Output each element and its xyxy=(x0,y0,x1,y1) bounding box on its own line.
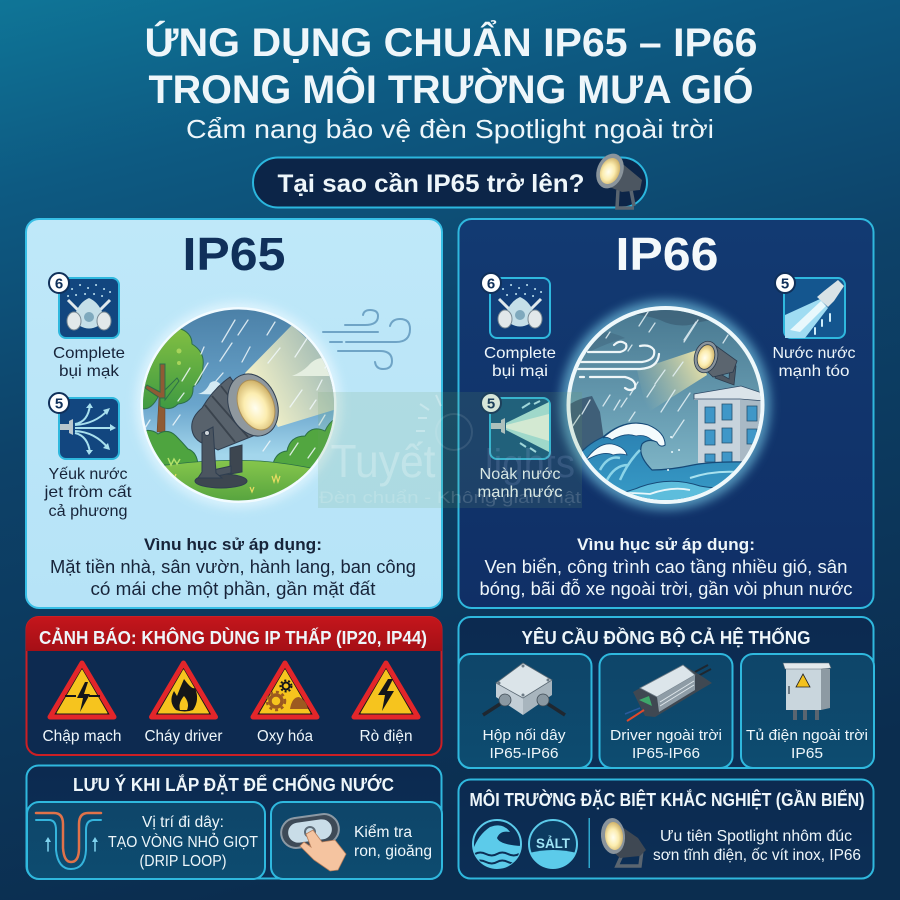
card: junction box xyxy=(458,654,592,768)
text: complete dust: Complete xyxy=(484,345,556,362)
icon: cabinet xyxy=(783,663,831,720)
icon: salt: SẢLT xyxy=(536,835,570,851)
panel: harsh environment xyxy=(458,780,874,878)
text: cabinet xyxy=(746,727,868,762)
panel: IP65 xyxy=(26,219,442,608)
text: applications IP66: bóng, bãi đỗ xe ngoài trời, gần vòi phun nước xyxy=(480,578,852,599)
watermark: Tuyết xyxy=(330,435,436,487)
heading: IP66: IP66 xyxy=(616,228,718,280)
icon: driver fire xyxy=(152,663,216,717)
icon: electric leak xyxy=(354,663,418,717)
text: applications IP65 xyxy=(50,535,416,599)
text: junction box xyxy=(482,727,566,762)
text: water jets: jet fròm cất xyxy=(43,484,132,501)
callout pill: why IP65 xyxy=(253,149,647,208)
text: strong jet left: mạnh nước xyxy=(478,484,562,501)
text: water jets xyxy=(43,466,132,520)
text: gasket check: ron, gioăng xyxy=(354,843,432,860)
text: applications IP65: Vìnu hục sử áp dụng: xyxy=(144,535,322,554)
illustration: storm wave and building xyxy=(560,300,770,515)
text: junction box: Hộp nối dây xyxy=(482,727,566,744)
text: applications IP66: Ven biển, công trình cao tầng nhiều gió, sân xyxy=(484,556,848,577)
text: strong jet left: Noàk nước xyxy=(480,466,560,483)
text: electric leak: Rò điện xyxy=(360,728,412,745)
text: applications IP66: Vìnu hục sử áp dụng: xyxy=(577,535,755,554)
text: strong jet right xyxy=(772,345,856,380)
text: drip loop: Vị trí đi dây: xyxy=(142,814,224,831)
heading: system requirements: YÊU CẦU ĐỒNG BỘ CẢ HỆ THỐNG xyxy=(522,627,810,648)
icon: gasket and hand xyxy=(279,812,346,871)
icon: aluminum spotlight xyxy=(599,817,646,866)
card: gasket check xyxy=(271,802,442,879)
text: complete dust xyxy=(53,345,125,380)
icon: water jets rating 5 xyxy=(49,393,119,459)
icon: strong jet left rating 5: 5 xyxy=(487,396,495,412)
text: applications IP65: có mái che một phần, gần mặt đất xyxy=(90,578,376,599)
panel: IP66 xyxy=(458,219,874,608)
text: applications IP66 xyxy=(480,535,852,599)
card: drip loop xyxy=(27,802,265,879)
heading: IP65: IP65 xyxy=(182,228,286,280)
warning header xyxy=(26,617,442,651)
spotlight xyxy=(192,366,287,488)
text: gasket check: Kiểm tra xyxy=(354,824,412,841)
heading: installation notes: LƯU Ý KHI LẮP ĐẶT ĐỂ CHỐNG NƯỚC xyxy=(73,774,394,795)
icon: water jets rating 5: 5 xyxy=(55,396,63,412)
icon: dust mask rating 6 xyxy=(49,273,119,338)
callout pill: why IP65: Tại sao cần IP65 trở lên? xyxy=(278,170,584,198)
text: gasket check xyxy=(354,824,432,860)
panel: installation notes xyxy=(26,766,442,879)
text: water jets: cả phương xyxy=(48,503,128,520)
icon: short circuit xyxy=(50,663,114,717)
text: driver fire: Cháy driver xyxy=(144,728,222,745)
icon: drip loop xyxy=(36,813,101,869)
watermark: Đèn chuẩn - Không gian thật xyxy=(319,488,581,507)
icon: salt xyxy=(529,820,577,870)
watermark xyxy=(318,392,582,508)
spotlight on roof xyxy=(691,339,737,385)
title xyxy=(144,18,758,112)
icon: strong jet left rating 5 xyxy=(481,393,550,459)
text: complete dust: bụi mại xyxy=(492,363,548,380)
text: harsh recommendation: Ưu tiên Spotlight nhôm đúc xyxy=(660,828,852,845)
text: junction box: IP65-IP66 xyxy=(490,745,558,762)
icon: strong jet right rating 5 xyxy=(775,273,845,338)
text: oxidation: Oxy hóa xyxy=(257,728,313,745)
icon: sea wave xyxy=(473,820,522,870)
watermark: lights xyxy=(485,442,575,486)
text: cabinet: Tủ điện ngoài trời xyxy=(746,727,868,744)
text: cabinet: IP65 xyxy=(791,745,823,762)
text: drip loop: TẠO VÒNG NHỎ GIỌT xyxy=(108,833,258,851)
text: strong jet right: Nước nước xyxy=(772,345,856,362)
panel: warning low IP xyxy=(26,617,442,755)
panel: system requirements xyxy=(458,617,874,768)
text: complete dust: bụi mạk xyxy=(59,363,120,380)
icon: dust mask rating 6: 6 xyxy=(55,276,63,292)
card: outdoor cabinet xyxy=(741,654,874,768)
icon: junction box xyxy=(483,663,565,715)
text: water jets: Yếuk nước xyxy=(48,466,128,483)
title: ỨNG DỤNG CHUẨN IP65 – IP66 xyxy=(144,18,758,65)
title: TRONG MÔI TRƯỜNG MƯA GIÓ xyxy=(148,66,754,112)
text: strong jet right: mạnh tóo xyxy=(778,363,850,380)
text: short circuit: Chập mạch xyxy=(42,728,122,745)
text: driver xyxy=(610,727,722,762)
text: strong jet left xyxy=(478,466,562,501)
icon: driver xyxy=(625,665,712,721)
warning header: CẢNH BÁO: KHÔNG DÙNG IP THẤP (IP20, IP44) xyxy=(39,627,427,648)
text: drip loop: (DRIP LOOP) xyxy=(140,853,226,870)
text: complete dust xyxy=(484,345,556,380)
icon: wind xyxy=(323,310,410,369)
icon: dust mask rating 6 xyxy=(481,273,550,338)
icon: dust mask rating 6: 6 xyxy=(487,276,495,292)
divider xyxy=(588,818,590,868)
text: complete dust: Complete xyxy=(53,345,125,362)
icon: oxidation xyxy=(253,663,317,717)
subtitle: Cẩm nang bảo vệ đèn Spotlight ngoài trời xyxy=(186,114,714,144)
icon: strong jet right rating 5: 5 xyxy=(781,276,789,292)
text: drip loop xyxy=(108,814,258,870)
text: driver: IP65-IP66 xyxy=(632,745,700,762)
icon: spotlight in pill xyxy=(591,149,642,208)
text: harsh recommendation xyxy=(653,828,861,864)
card: outdoor driver xyxy=(600,654,732,768)
text: harsh recommendation: sơn tĩnh điện, ốc vít inox, IP66 xyxy=(653,847,861,864)
illustration: garden spotlight in rain xyxy=(135,302,345,510)
text: driver: Driver ngoài trời xyxy=(610,727,722,744)
text: applications IP65: Mặt tiền nhà, sân vườn, hành lang, ban công xyxy=(50,556,416,577)
